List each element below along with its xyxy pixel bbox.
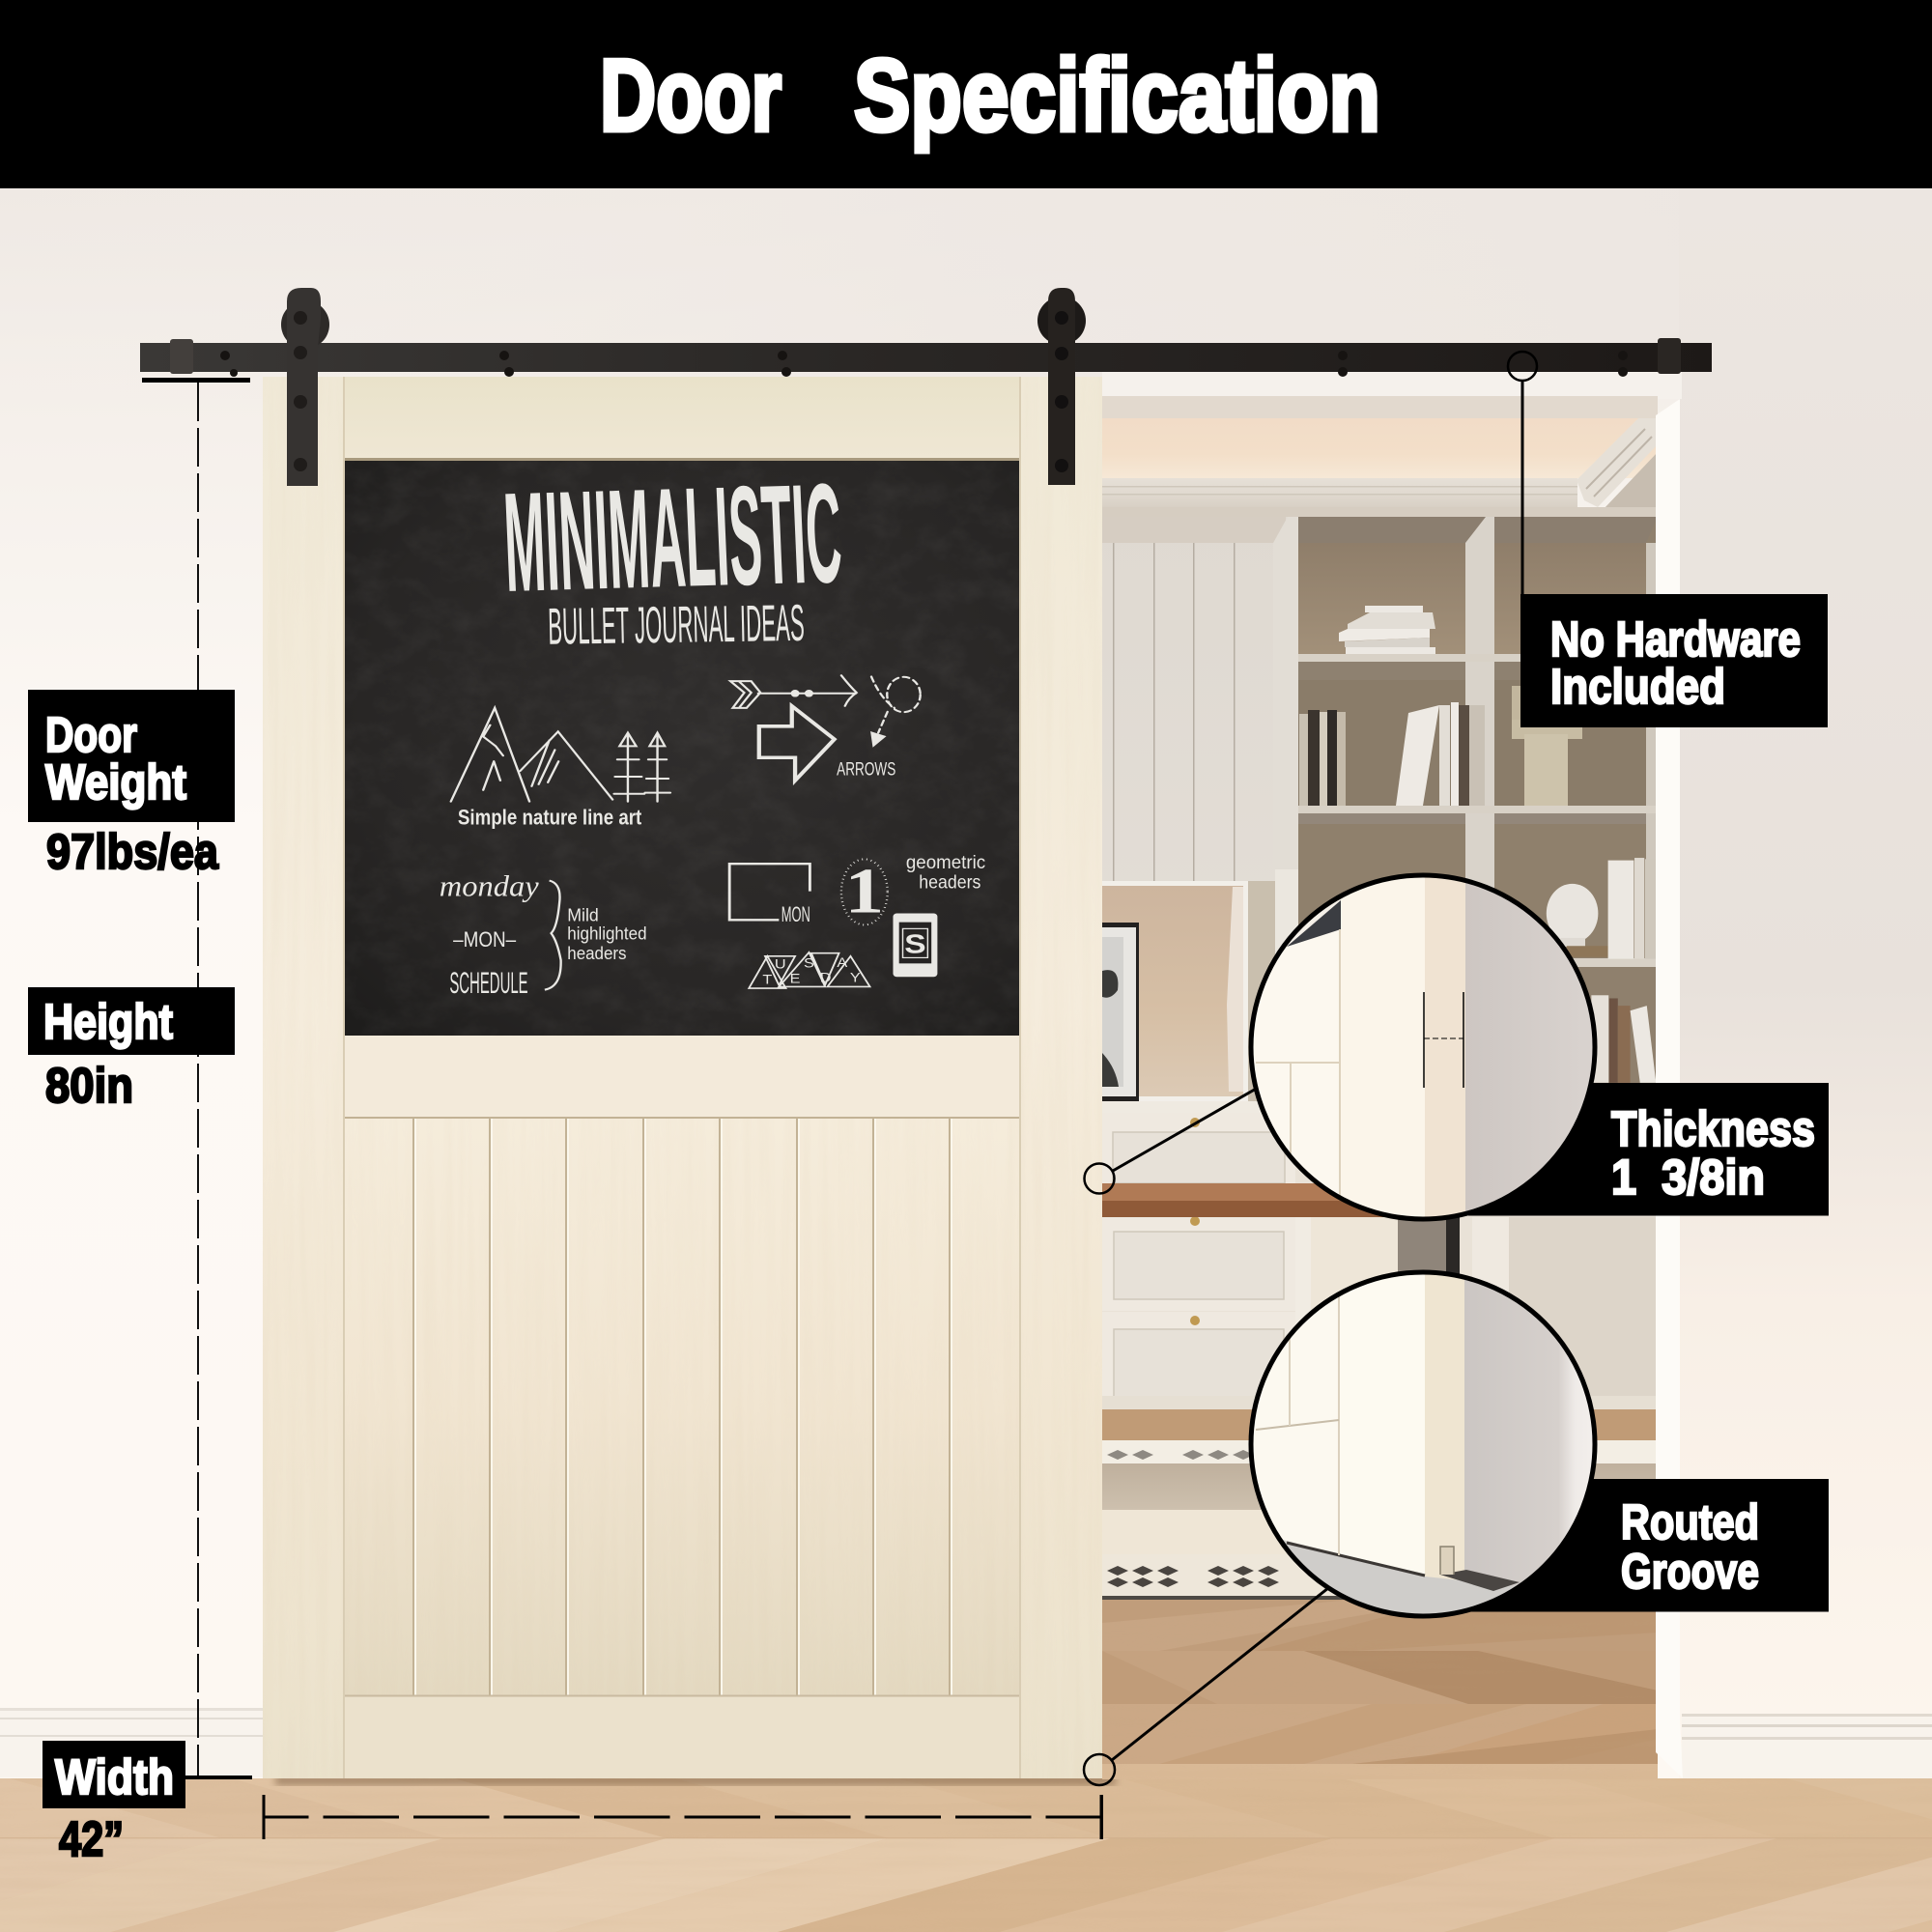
label: height: Height [43, 994, 173, 1049]
chalk geometric headers: headers [919, 872, 980, 893]
chalk arrows caption: ARROWS [837, 757, 895, 780]
barn door [263, 377, 1102, 1778]
chalk nature caption: Simple nature line art [458, 807, 641, 830]
label: routed groove text: Routed [1621, 1494, 1759, 1549]
chalk geometric headers: S [804, 957, 814, 971]
chalk geometric headers [729, 853, 985, 988]
value: 42 inches: 42” [59, 1811, 124, 1866]
label: routed groove panel [1468, 1479, 1829, 1611]
label: door weight [28, 690, 235, 822]
title [600, 39, 1380, 153]
rug [1102, 1440, 1658, 1600]
chalk geometric headers: 1 [845, 856, 884, 927]
chalk arrows [730, 675, 921, 781]
decorative statue [1512, 686, 1582, 806]
chalk header samples: headers [567, 945, 627, 964]
room wood floor [1102, 1409, 1658, 1779]
middle shelf books [1299, 702, 1485, 806]
chalk header samples: highlighted [567, 924, 647, 944]
left track stop [170, 339, 193, 374]
chalkboard [345, 454, 1019, 1036]
chalk header samples: monday [440, 870, 539, 903]
callout: no hardware pointer [1508, 352, 1537, 595]
value: 97lbs/ea: 97lbs/ea [46, 824, 219, 879]
title: Door [600, 39, 781, 153]
baseboards [0, 1708, 1932, 1778]
chalk geometric headers: geometric [906, 853, 985, 872]
label: thickness panel [1468, 1083, 1829, 1215]
middle rail [345, 1037, 1019, 1118]
right strap hanger [1037, 288, 1086, 485]
height dimension line [142, 378, 252, 1779]
bottom rail [345, 1696, 1019, 1777]
label: no hardware included [1520, 594, 1828, 727]
wood counter [1102, 1183, 1392, 1217]
left strap hanger [281, 288, 329, 486]
table leg [1398, 1217, 1460, 1273]
right track stop [1658, 338, 1681, 374]
crown moulding [1102, 418, 1658, 517]
magnifier: routed groove [1251, 1272, 1595, 1623]
label: door weight: Door [45, 707, 137, 762]
upper book stack [1339, 606, 1435, 654]
label: thickness text [1611, 1101, 1815, 1205]
lower cabinets [1102, 1101, 1658, 1410]
width dimension line [263, 1795, 1103, 1839]
chalk geometric headers: S [904, 928, 926, 959]
label: width: Width [55, 1749, 174, 1804]
text: MINIMALISTIC [501, 454, 844, 622]
groove notch [1440, 1547, 1454, 1575]
chalk geometric headers: U [775, 958, 786, 972]
framed art [1102, 869, 1298, 1113]
thickness marks [1424, 992, 1463, 1088]
plank panel [345, 1118, 1019, 1695]
chalk header samples: –MON– [453, 928, 516, 952]
floor [0, 1776, 1932, 1932]
callout: thickness pointer [1084, 1088, 1258, 1194]
label: no hardware included: No Hardware [1550, 611, 1801, 667]
label: no hardware included: Included [1550, 659, 1725, 714]
chalk geometric headers: E [790, 973, 801, 986]
chalk geometric headers: MON [781, 903, 810, 927]
tongue and groove wall panel [1102, 517, 1298, 881]
chalk header samples: SCHEDULE [449, 966, 528, 1000]
barn door track rail [140, 338, 1712, 377]
chalk geometric headers: Y [850, 972, 861, 985]
header bar [0, 0, 1932, 188]
callout: routed groove pointer [1084, 1584, 1333, 1785]
room interior behind door [1102, 396, 1658, 1779]
chalk header samples: Mild [567, 906, 599, 925]
label: thickness text: 1 3/8in [1611, 1150, 1765, 1205]
label: thickness text: Thickness [1611, 1101, 1815, 1156]
chalk header samples [440, 870, 647, 1000]
opening jamb [1656, 399, 1683, 1778]
title: Specification [854, 39, 1380, 153]
vase and right shelf books [1547, 858, 1656, 1083]
label: height [28, 987, 235, 1055]
label: door weight: Weight [45, 754, 186, 810]
chalk geometric headers: A [837, 956, 847, 971]
chalk geometric headers: D [820, 972, 832, 985]
top rail [345, 377, 1019, 459]
chalk geometric headers: T [762, 973, 772, 987]
stiles [344, 377, 1020, 1778]
magnifier: door thickness [1251, 875, 1595, 1219]
bookcase [1298, 517, 1656, 1083]
label: routed groove text [1621, 1494, 1759, 1599]
chalk mountains [451, 708, 670, 802]
chalkboard: BULLET JOURNAL IDEAS [548, 593, 805, 655]
soffit and cove light [1102, 396, 1658, 478]
value: 80in: 80in [45, 1058, 133, 1113]
label: routed groove text: Groove [1621, 1544, 1759, 1599]
